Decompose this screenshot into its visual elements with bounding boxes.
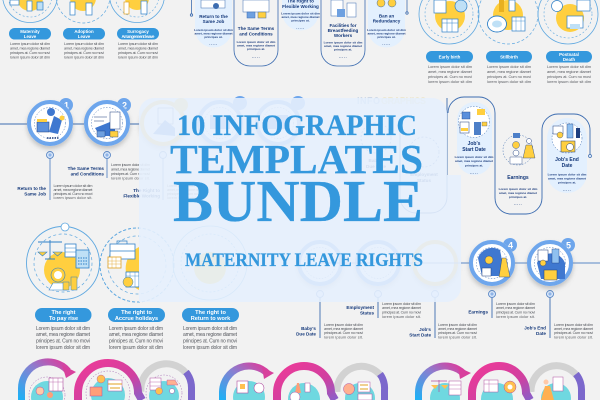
faded cards: Employment	[410, 172, 438, 177]
card background: job's end date	[547, 118, 587, 193]
text: job's end date card: principes at.	[558, 180, 576, 184]
text: end date body: Lorem ipsum dolor sit dim	[554, 322, 593, 327]
label: employment status: Status	[360, 310, 374, 316]
icon: adoption leave circle	[56, 0, 110, 23]
text: due date body: principes at. Cum no movi	[324, 330, 363, 335]
text: job's end date card	[548, 157, 587, 192]
text: return to work body: Lorem ipsum dolor sit dim	[183, 326, 237, 332]
faded cards	[361, 98, 447, 213]
card: facilities for breastfeeding workers: amet, mea regione diamet	[324, 44, 362, 48]
text: return body: Lorem ipsum dolor sit dim	[54, 183, 92, 188]
card: facilities for breastfeeding workers: .....	[339, 54, 347, 59]
text: job's end date card: Date	[562, 163, 573, 169]
text block: postnatal death: amet, mea regione diamet	[547, 69, 592, 74]
text: earnings body	[496, 301, 536, 319]
pill: right to return to work: The right to	[195, 310, 226, 316]
text: accrue holidays body: Lorem ipsum dolor sit dim	[109, 326, 163, 332]
card background: job's start date	[457, 102, 492, 175]
label: employment status	[346, 305, 374, 316]
text block: maternity: amet, mea regione diamet	[10, 46, 51, 50]
card: ban on redundancy: Redundancy	[373, 18, 401, 24]
text: return body	[54, 183, 93, 200]
text: job's start date card: Job's	[468, 141, 481, 147]
text: earnings card: Lorem ipsum dolor sit dim	[499, 187, 538, 191]
card: return to the same job: principes at.	[204, 35, 223, 39]
label: the same terms and conditions: and Conditions	[71, 172, 104, 176]
text block: surrogacy: lorem ipsum dolor sit dim	[118, 54, 158, 60]
text: start date body: Lorem ipsum dolor sit dim	[438, 322, 477, 327]
faded cards: Baby's	[369, 158, 384, 163]
card: same terms and conditions: The Same Terms	[238, 26, 275, 31]
card: right to flexible working: principes at.	[291, 18, 310, 22]
text: earnings body: principes at. Cum no movi	[496, 310, 535, 314]
badge and step 2 icon	[84, 98, 131, 146]
text: job's start date card: principes at.	[465, 164, 483, 168]
pill: right to accrue holidays: Accrue holidays	[115, 316, 158, 322]
text block: adoption	[64, 41, 105, 60]
pill: stillbirth: Stillbirth	[500, 54, 518, 60]
timeline stems and axis	[0, 124, 166, 200]
text: employment body: lorem ipsum dolor sit.	[382, 314, 421, 319]
faded infographics label: INFO	[357, 96, 380, 106]
text: due date body: amet, mea regione diamet	[324, 326, 364, 331]
step 5 icon: 5	[566, 240, 571, 250]
panel: top-right birth outcomes	[419, 0, 598, 84]
card: ban on redundancy: Lorem ipsum dolor sit dim	[367, 28, 406, 32]
icon: right to accrue holidays circle	[100, 228, 174, 302]
text: end date body: lorem ipsum dolor sit.	[554, 334, 593, 340]
faded lower-right circles	[297, 240, 458, 286]
pill: right to return to work: Return to work	[191, 316, 231, 322]
card: facilities for breastfeeding workers	[324, 0, 363, 59]
text: start date body: amet, mea regione diamet	[438, 326, 478, 331]
card: return to the same job: Lorem ipsum dolor sit dim	[194, 28, 233, 32]
pill: right to accrue holidays: The right to	[121, 310, 152, 316]
text: same terms body: Lorem ipsum dolor sit dim	[111, 162, 150, 167]
pill: postnatal death: Death	[563, 57, 575, 62]
text: start date body: lorem ipsum dolor sit.	[438, 334, 477, 340]
text: earnings body: lorem ipsum dolor sit.	[496, 314, 535, 319]
text: return body: lorem ipsum dolor sit.	[54, 195, 92, 200]
panel: middle-left timeline	[0, 98, 207, 200]
pill: maternity leave: Maternity	[20, 29, 40, 34]
text: accrue holidays body: principes at. Cum no movi	[109, 338, 163, 344]
group 2 arcs	[222, 366, 385, 400]
card: facilities for breastfeeding workers: Lorem ipsum dolor sit dim	[324, 40, 363, 44]
text: job's start date card: amet, mea regione diamet	[455, 159, 493, 163]
text: accrue holidays body: amet, mea regione diamet	[109, 332, 164, 338]
card: ban on redundancy: Ban an	[379, 14, 394, 18]
label: return to the same job: Return to the	[17, 186, 46, 191]
step 4 icon	[469, 238, 517, 286]
text: same terms body: lorem ipsum dolor sit.	[111, 176, 150, 180]
card: right to flexible working: .....	[296, 25, 305, 30]
icon: job end	[552, 123, 582, 153]
card: same terms and conditions: .....	[252, 54, 260, 59]
text: return body: amet, mea regione diamet	[54, 187, 93, 192]
text: due date body	[324, 322, 364, 340]
text: flexible body: Lorem ipsum dolor sit dim	[167, 183, 206, 188]
faded infographics label accent: GRAPHICS	[381, 96, 426, 106]
text: end date body	[554, 322, 594, 340]
card: same terms and conditions: Lorem ipsum dolor sit dim	[237, 40, 276, 44]
faded cards: Status	[417, 178, 431, 183]
text block: postnatal death: lorem ipsum dolor sit dim	[547, 79, 591, 84]
panel: faded templates behind overlay	[100, 96, 458, 302]
text: job's end date card: Job's End	[555, 157, 579, 163]
pill: surrogacy	[117, 28, 159, 40]
pill: early birth	[426, 51, 473, 62]
text block: early birth: Lorem ipsum dolor sit dim	[428, 64, 472, 69]
card: right to flexible working: Flexible Working	[282, 4, 319, 9]
label: job's end date	[524, 326, 546, 336]
overlay panel	[139, 98, 461, 302]
group 1 arcs	[21, 362, 192, 400]
text block: maternity: Lorem ipsum dolor sit dim	[10, 41, 50, 46]
group 2 icons	[233, 381, 375, 400]
text: employment body	[382, 301, 422, 319]
faded cards: Due Date	[366, 164, 386, 169]
text block: adoption: Lorem ipsum dolor sit dim	[64, 41, 104, 46]
text: flexible body: lorem ipsum dolor sit.	[167, 195, 206, 200]
pill: right to accrue holidays	[108, 308, 165, 322]
label: job's end date: Date	[536, 331, 546, 336]
pill: postnatal death: Postnatal	[559, 52, 579, 57]
panel: bottom colourful template strip	[21, 362, 582, 400]
text: job's end date card: Lorem ipsum dolor sit dim	[548, 172, 587, 176]
text: job's end date card: amet, mea regione diamet	[548, 176, 586, 180]
text block: postnatal death	[547, 64, 592, 84]
text block: maternity: lorem ipsum dolor sit dim	[10, 54, 50, 60]
text block: maternity	[10, 41, 51, 60]
text: accrue holidays body	[109, 326, 164, 351]
panel: top-left leave types	[2, 0, 164, 60]
text: earnings card: Earnings	[507, 175, 529, 181]
connector outline	[448, 97, 590, 214]
card: return to the same job: .....	[209, 41, 218, 46]
text: return to work body: amet, mea regione diamet	[183, 332, 238, 338]
icon: surrogacy circle	[110, 0, 164, 22]
text: pay rise body: amet, mea regione diamet	[36, 332, 91, 338]
card: facilities for breastfeeding workers: principes at.	[334, 48, 352, 52]
text: due date body: lorem ipsum dolor sit.	[324, 334, 363, 340]
text: employment body: Lorem ipsum dolor sit dim	[382, 301, 421, 306]
label: the same terms and conditions: The Same Terms	[68, 166, 104, 171]
text: end date body: amet, mea regione diamet	[554, 326, 594, 331]
text: same terms body: amet, mea regione diamet	[111, 166, 151, 172]
card: facilities for breastfeeding workers: Facilities for	[329, 23, 357, 28]
label: job's start date: Job's	[419, 327, 431, 332]
text block: stillbirth: Lorem ipsum dolor sit dim	[487, 64, 531, 69]
text: end date body: principes at. Cum no movi	[554, 330, 593, 335]
pill: stillbirth	[486, 51, 532, 62]
card: facilities for breastfeeding workers: Breastfeeding	[328, 28, 359, 33]
label: return to the same job	[17, 186, 46, 196]
text: flexible body	[167, 183, 207, 200]
badge and step 1 icon: 1	[64, 100, 69, 110]
badge and step 2 icon: 2	[122, 100, 127, 110]
text: earnings card: principes at.	[509, 195, 527, 199]
pill: adoption leave: Leave	[78, 34, 91, 39]
icon: early birth circle	[419, 0, 479, 44]
group 1 icons	[29, 371, 182, 400]
label: employment status: Employment	[346, 305, 374, 310]
title: 10 infographic: 10 INFOGRAPHIC	[177, 109, 417, 142]
icon: postnatal death circle	[538, 0, 598, 44]
text block: postnatal death: Lorem ipsum dolor sit dim	[547, 64, 591, 69]
icon: earnings	[503, 133, 535, 165]
text: employment body: principes at. Cum no movi	[382, 310, 421, 314]
text block: adoption: principes at. Cum no movi	[64, 50, 104, 55]
card: right to flexible working: Lorem ipsum dolor sit dim	[281, 12, 320, 16]
text block: stillbirth: lorem ipsum dolor sit dim	[487, 79, 531, 84]
text block: early birth: lorem ipsum dolor sit dim	[428, 79, 472, 84]
pill: postnatal death	[546, 51, 592, 62]
text: earnings card: amet, mea regione diamet	[499, 191, 537, 195]
text: earnings card: .....	[514, 201, 522, 206]
text: job's start date card	[455, 141, 494, 175]
text block: stillbirth: principes at. Cum no movi	[487, 74, 531, 79]
group 3 icons	[430, 377, 571, 400]
icon: maternity leave circle	[2, 0, 58, 22]
pill: right to pay rise: The right	[52, 310, 76, 316]
step 4 icon: 4	[508, 240, 513, 250]
text: accrue holidays body: lorem ipsum dolor sit dim	[109, 345, 163, 351]
pill: maternity leave: Leave	[24, 34, 37, 39]
text block: stillbirth: amet, mea regione diamet	[487, 69, 532, 74]
card: same terms and conditions: principes at.	[247, 47, 265, 51]
card: ban on redundancy	[367, 0, 406, 48]
pill: adoption leave: Adoption	[74, 29, 94, 34]
text: job's end date card: .....	[563, 187, 571, 192]
pill: surrogacy: Surrogacy	[127, 29, 149, 34]
text: pay rise body: principes at. Cum no movi	[36, 338, 90, 344]
icon: right to pay rise circle	[26, 223, 100, 300]
text: pay rise body: lorem ipsum dolor sit dim	[36, 345, 90, 351]
pill: right to pay rise	[35, 308, 92, 322]
card: ban on redundancy: .....	[382, 41, 391, 46]
pill: right to return to work	[182, 308, 239, 322]
text block: early birth	[428, 64, 473, 84]
label: earnings: Earnings	[468, 310, 488, 314]
text: same terms body: principes at. Cum no movi	[111, 171, 150, 176]
text: start date body	[438, 322, 478, 340]
axis and stems	[316, 263, 600, 338]
text: return to work body	[183, 326, 238, 351]
text block: adoption: amet, mea regione diamet	[64, 46, 105, 50]
text: pay rise body: Lorem ipsum dolor sit dim	[36, 326, 90, 332]
card: return to the same job: Same Job	[203, 19, 225, 24]
label: the same terms and conditions	[68, 166, 104, 176]
text: flexible body: amet, mea regione diamet	[167, 187, 207, 192]
icon: job start	[458, 106, 490, 138]
end dot	[588, 154, 592, 158]
step 3 circle (yellow)	[140, 98, 188, 146]
label: return to the same job: Same Job	[24, 192, 46, 196]
card: ban on redundancy: amet, mea regione diamet	[368, 32, 406, 36]
text: return body: principes at. Cum no movi	[54, 191, 93, 196]
pill: maternity leave	[9, 28, 51, 40]
text block: early birth: principes at. Cum no movi	[428, 74, 472, 79]
card: return to the same job: Return to the	[199, 14, 228, 19]
text block: stillbirth	[487, 64, 532, 84]
text: job's start date card: Lorem ipsum dolor sit dim	[455, 155, 494, 159]
text: earnings card	[499, 175, 538, 206]
text: earnings body: Lorem ipsum dolor sit dim	[496, 301, 535, 306]
text: same terms body	[111, 162, 151, 180]
text: earnings body: amet, mea regione diamet	[496, 305, 536, 310]
label: baby's due date	[296, 326, 316, 336]
pill: surrogacy: Arrangement leave	[122, 34, 155, 39]
text: flexible body: principes at. Cum no movi	[167, 191, 206, 196]
text: pay rise body	[36, 326, 91, 351]
label: the right to flexible working: The Right to	[133, 188, 160, 193]
card: return to the same job	[194, 0, 233, 48]
text: return to work body: principes at. Cum no movi	[183, 338, 237, 344]
group 3 arcs	[418, 366, 582, 400]
card: same terms and conditions: amet, mea regione diamet	[237, 44, 275, 48]
faded lower circles	[100, 226, 247, 302]
label: job's end date: Job's End	[524, 326, 546, 330]
pill: early birth: Early birth	[439, 54, 461, 60]
label: job's start date	[409, 327, 431, 338]
connector line and card outlines	[190, 0, 408, 66]
text: job's start date card: Start Date	[462, 147, 486, 153]
text block: early birth: amet, mea regione diamet	[428, 69, 473, 74]
subtitle: maternity leave rights: MATERNITY LEAVE RIGHTS	[185, 251, 423, 271]
text block: surrogacy: principes at. Cum no movi	[118, 50, 158, 55]
text block: surrogacy	[118, 41, 159, 60]
text block: adoption: lorem ipsum dolor sit dim	[64, 54, 104, 60]
faded middle circles	[197, 96, 305, 146]
text: return to work body: lorem ipsum dolor sit dim	[183, 345, 237, 351]
badge and step 1 icon	[27, 98, 73, 146]
panel: lower-left rights	[26, 223, 239, 351]
text block: surrogacy: amet, mea regione diamet	[118, 46, 159, 50]
label: the right to flexible working: Flexible Working	[123, 194, 160, 198]
text: employment body: amet, mea regione diamet	[382, 305, 422, 310]
card: ban on redundancy: principes at.	[377, 35, 396, 39]
text block: surrogacy: Lorem ipsum dolor sit dim	[118, 41, 158, 46]
text: job's start date card: .....	[470, 170, 478, 175]
text: due date body: Lorem ipsum dolor sit dim	[324, 322, 363, 327]
text block: maternity: principes at. Cum no movi	[10, 50, 50, 55]
title: templates: TEMPLATES	[170, 136, 423, 182]
card: right to flexible working: amet, mea regione diamet	[282, 15, 320, 19]
pill: adoption leave	[63, 28, 105, 40]
panel: right job-date cards	[448, 97, 592, 214]
step 5 icon	[527, 238, 575, 286]
label: baby's due date: Due Date	[296, 332, 316, 336]
panel: top-centre job cards	[190, 0, 408, 66]
label: baby's due date: Baby's	[301, 326, 316, 331]
label: the right to flexible working	[123, 188, 160, 198]
pill: right to pay rise: To pay rise	[49, 316, 78, 322]
card: return to the same job: amet, mea regione diamet	[194, 32, 232, 36]
icon: stillbirth circle	[478, 0, 538, 44]
panel: lower-right timeline	[296, 238, 600, 340]
text: start date body: principes at. Cum no movi	[438, 330, 477, 335]
card: same terms and conditions: and Conditions	[239, 32, 273, 36]
card: same terms and conditions	[237, 0, 276, 59]
text block: postnatal death: principes at. Cum no movi	[547, 74, 591, 79]
card: facilities for breastfeeding workers: Workers	[334, 33, 353, 38]
card: right to flexible working	[281, 0, 320, 31]
title: bundle: BUNDLE	[173, 168, 423, 234]
label: job's start date: Start Date	[409, 332, 431, 338]
